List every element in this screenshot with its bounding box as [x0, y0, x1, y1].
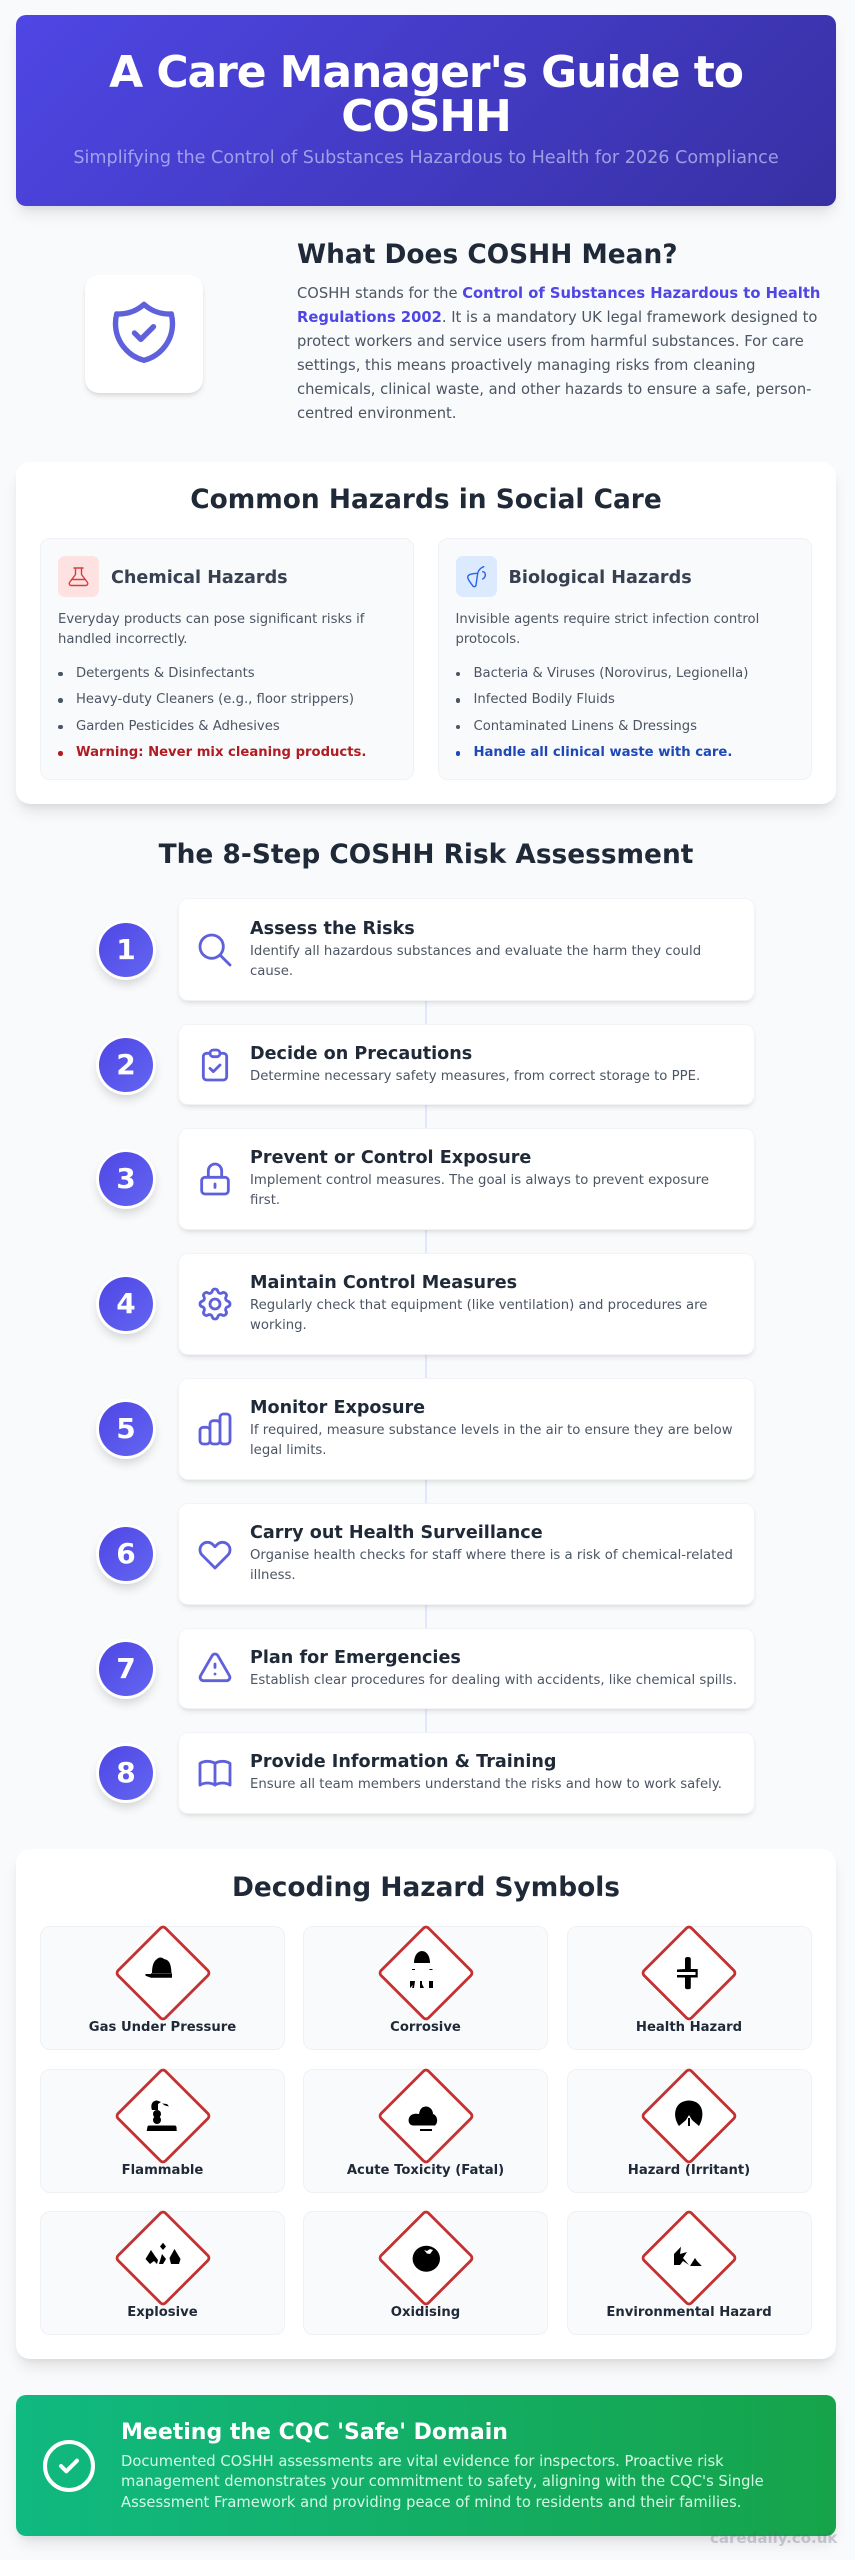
label: Hazard (Irritant): [628, 2162, 750, 2178]
step description: Implement control measures. The goal is always to prevent exposure: [250, 1172, 709, 1188]
heading: decoding hazard symbols: Decoding Hazard Symbols: [232, 1872, 620, 1903]
icon: health hazard pictogram: [642, 1926, 736, 2020]
card: health surveillance: [179, 1504, 754, 1604]
card: decide on precautions: [179, 1025, 754, 1104]
step description: Identify all hazardous substances and evaluate the harm they could: [250, 944, 701, 958]
title: [109, 47, 743, 142]
callout body: management demonstrates your commitment to safety, aligning with the CQC's Single: [121, 2473, 764, 2490]
icon: padlock: [200, 1162, 230, 1196]
icon card: shield: [85, 275, 203, 393]
list item: Infected Bodily Fluids: [474, 692, 615, 707]
subtitle: Simplifying the Control of Substances Hazardous to Health for 2026 Compliance: [73, 148, 779, 168]
intro paragraph: protect workers and service users from harmful substances. For care: [297, 333, 804, 350]
symbol card: gas under pressure: [40, 1926, 285, 2050]
label: Gas Under Pressure: [89, 2020, 236, 2035]
label: Oxidising: [391, 2305, 460, 2320]
step description: [250, 1422, 733, 1458]
step number 1: [99, 922, 153, 976]
step number 7: [99, 1642, 153, 1696]
panel: chemical hazards: [40, 538, 414, 780]
label: Environmental Hazard: [606, 2305, 772, 2320]
intro paragraph: centred environment.: [297, 405, 456, 422]
label: Corrosive: [390, 2020, 461, 2035]
watermark: caredaily.co.uk: [710, 2529, 837, 2547]
intro paragraph: Regulations 2002. It is a mandatory UK legal framework designed to: [297, 309, 817, 326]
step description: [250, 944, 701, 979]
symbol card: flammable: [40, 2068, 285, 2192]
card: information and training: [179, 1733, 754, 1813]
step description: legal limits.: [250, 1443, 327, 1458]
card: maintain control measures: [179, 1254, 754, 1354]
callout body: [121, 2452, 764, 2511]
symbol card: health hazard: [566, 1926, 812, 2050]
step description: Determine necessary safety measures, from correct storage to PPE.: [250, 1068, 700, 1084]
icon: cog: [198, 1288, 232, 1320]
card: monitor exposure: [179, 1379, 754, 1479]
list item: Bacteria & Viruses (Norovirus, Legionella): [474, 666, 748, 680]
chemical description: [58, 612, 365, 647]
step 4: [94, 1253, 755, 1358]
callout body: Documented COSHH assessments are vital evidence for inspectors. Proactive risk: [121, 2452, 724, 2470]
icon: gas cylinder pictogram: [116, 1926, 210, 2020]
step 2: [94, 1024, 755, 1108]
heading: 8-step risk assessment: The 8-Step COSHH Risk Assessment: [159, 839, 693, 870]
step 6: [94, 1503, 755, 1608]
callout title: Meeting the CQC 'Safe' Domain: [121, 2420, 508, 2444]
icon: flammable pictogram: [116, 2068, 210, 2164]
list item: Garden Pesticides & Adhesives: [76, 718, 280, 734]
biological description: [456, 612, 759, 647]
step title: Carry out Health Surveillance: [250, 1523, 543, 1543]
step number 7: 7: [116, 1652, 136, 1684]
chemical description: Everyday products can pose significant risks if: [58, 612, 364, 626]
step title: Assess the Risks: [250, 919, 415, 939]
card: prevent or control exposure: [179, 1129, 754, 1229]
label: Health Hazard: [636, 2020, 742, 2035]
symbol card: environmental hazard: [566, 2211, 812, 2335]
step description: cause.: [250, 964, 293, 979]
panel: hazard symbols: [16, 1849, 836, 2359]
step number 6: [99, 1527, 153, 1581]
step number 3: [99, 1152, 153, 1206]
step number 3: 3: [116, 1162, 136, 1195]
icon: heart: [198, 1540, 232, 1570]
heading: common hazards: Common Hazards in Social Care: [190, 484, 662, 515]
icon: warning triangle: [198, 1652, 232, 1682]
panel: common hazards: [16, 462, 836, 804]
step title: Decide on Precautions: [250, 1044, 472, 1064]
step number 5: [99, 1402, 153, 1456]
step 3: [94, 1128, 755, 1233]
title: A Care Manager's Guide to: [109, 47, 743, 98]
icon: check circle: [43, 2440, 95, 2492]
icon: biological: [456, 556, 496, 597]
step description: [250, 1548, 733, 1583]
icon: explosive pictogram: [116, 2210, 210, 2306]
biological description: Invisible agents require strict infection control: [456, 612, 759, 626]
list item: Heavy-duty Cleaners (e.g., floor strippers): [76, 692, 354, 707]
step number 2: 2: [116, 1048, 136, 1080]
biological description: protocols.: [456, 632, 520, 647]
symbol card: oxidising: [303, 2211, 548, 2335]
step number 5: 5: [116, 1412, 136, 1445]
step 7: [94, 1628, 755, 1712]
icon: environmental hazard pictogram: [642, 2210, 736, 2306]
step number 6: 6: [116, 1537, 136, 1570]
intro paragraph: [297, 285, 820, 422]
step title: Maintain Control Measures: [250, 1273, 517, 1293]
clinical waste item: Handle all clinical waste with care.: [474, 745, 732, 760]
step title: Monitor Exposure: [250, 1398, 425, 1418]
intro paragraph: chemicals, clinical waste, and other hazards to ensure a safe, person-: [297, 381, 812, 398]
step 1: [94, 919, 755, 1004]
step description: If required, measure substance levels in the air to ensure they are below: [250, 1422, 733, 1438]
icon: magnifier: [198, 934, 232, 966]
step description: [250, 1298, 707, 1333]
card: assess the risks: [179, 899, 754, 1000]
icon: shield check: [112, 302, 176, 363]
step number 8: 8: [116, 1756, 136, 1789]
intro paragraph: COSHH stands for the Control of Substances Hazardous to Health: [297, 285, 820, 302]
label: Explosive: [127, 2305, 198, 2320]
step description: Regularly check that equipment (like ventilation) and procedures are: [250, 1298, 707, 1312]
icon: clipboard: [202, 1048, 228, 1082]
step title: Provide Information & Training: [250, 1752, 556, 1772]
step description: first.: [250, 1193, 280, 1208]
step number 2: [99, 1038, 153, 1092]
step description: Organise health checks for staff where there is a risk of chemical-related: [250, 1548, 733, 1562]
panel: biological hazards: [438, 538, 812, 780]
step 8: [94, 1732, 755, 1817]
icon: bar chart: [198, 1412, 232, 1446]
symbol card: acute toxicity: [303, 2068, 548, 2192]
step 5: [94, 1378, 755, 1483]
step description: [250, 1172, 709, 1208]
card: plan for emergencies: [179, 1629, 754, 1708]
step title: Prevent or Control Exposure: [250, 1148, 531, 1168]
list item: Detergents & Disinfectants: [76, 666, 255, 680]
symbol card: corrosive: [303, 1926, 548, 2050]
symbol card: irritant: [566, 2068, 812, 2192]
icon: irritant pictogram: [642, 2068, 736, 2164]
step description: working.: [250, 1318, 307, 1333]
biological heading: Biological Hazards: [508, 568, 692, 588]
list item: Contaminated Linens & Dressings: [474, 718, 697, 734]
step title: Plan for Emergencies: [250, 1648, 461, 1668]
step number 8: [99, 1746, 153, 1800]
icon: open book: [198, 1760, 232, 1787]
chemical heading: Chemical Hazards: [111, 568, 288, 588]
symbol card: explosive: [40, 2211, 285, 2335]
intro paragraph: settings, this means proactively managing risks from cleaning: [297, 357, 755, 374]
step number 4: [99, 1277, 153, 1331]
step description: Establish clear procedures for dealing with accidents, like chemical spills.: [250, 1672, 737, 1688]
header banner: [16, 15, 836, 206]
step description: Ensure all team members understand the risks and how to work safely.: [250, 1776, 722, 1792]
heading: What Does COSHH Mean: What Does COSHH Mean?: [297, 239, 678, 270]
label: Flammable: [122, 2162, 203, 2178]
step description: illness.: [250, 1568, 296, 1583]
icon: oxidising pictogram: [378, 2210, 474, 2306]
step number 1: 1: [116, 932, 136, 966]
title: COSHH: [341, 91, 511, 142]
callout body: Assessment Framework and providing peace of mind to residents and their families.: [121, 2494, 741, 2511]
callout: CQC safe domain: [16, 2395, 836, 2536]
warning item: Warning: Never mix cleaning products.: [76, 745, 366, 760]
label: Acute Toxicity (Fatal): [347, 2162, 504, 2178]
icon: acute toxicity pictogram: [378, 2068, 474, 2164]
chemical description: handled incorrectly.: [58, 632, 187, 647]
icon: flask: [58, 556, 99, 597]
step number 4: 4: [116, 1287, 136, 1320]
icon: corrosive pictogram: [378, 1926, 474, 2020]
